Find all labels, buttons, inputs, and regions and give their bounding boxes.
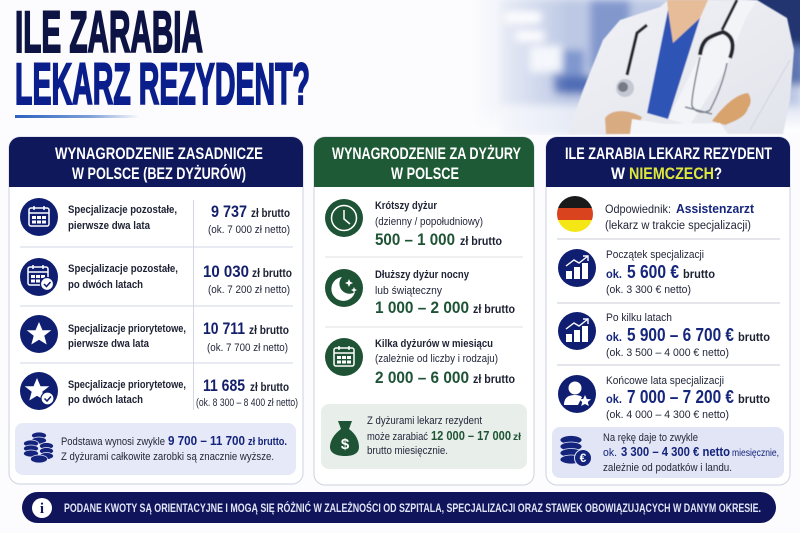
row: start of specialisation — [606, 249, 715, 296]
row: final years: brutto — [738, 394, 770, 406]
callout text: Z dyżurami całkowite zarobki są znacznie wyższe. — [61, 451, 274, 463]
panel header — [314, 137, 534, 187]
callout text: brutto miesięcznie. — [367, 445, 448, 457]
row 2 label — [68, 263, 178, 291]
row 1 label: Specjalizacje pozostałe, — [68, 204, 177, 216]
row 2 text: lub świąteczny — [375, 285, 442, 297]
text: LEKARZ REZYDENT? — [15, 52, 310, 117]
row: final years — [606, 375, 770, 421]
row 1 amount: zł brutto — [251, 208, 290, 220]
callout text — [61, 433, 287, 463]
icon: rising bars — [558, 249, 596, 287]
row 1 amount: (ok. 7 000 zł netto) — [208, 224, 290, 236]
heading: W POLSCE — [391, 164, 459, 183]
row: after a few years — [606, 312, 770, 359]
icon: coin stacks — [24, 432, 54, 463]
heading: W — [611, 164, 626, 183]
callout text: miesięcznie, — [732, 447, 779, 459]
row: after a few years: Po kilku latach — [606, 312, 672, 324]
row 3 label — [68, 323, 186, 350]
heading — [55, 144, 263, 183]
row: start of specialisation: brutto — [683, 269, 715, 281]
row 2 label: Specjalizacje pozostałe, — [68, 263, 178, 275]
row 3 text: (zależnie od liczby i rodzaju) — [375, 353, 498, 365]
callout: net pay — [552, 427, 784, 478]
row 4 label: po dwóch latach — [68, 394, 143, 406]
row 2 amount — [203, 262, 292, 296]
row 3 label: Specjalizacje priorytetowe, — [68, 323, 186, 335]
icon: person with star — [558, 375, 596, 413]
panel: resident pay in Germany — [546, 137, 790, 485]
heading: NIEMCZECH — [629, 164, 714, 183]
icon: coins with euro: € — [580, 451, 587, 465]
row 1 label: pierwsze dwa lata — [68, 220, 151, 232]
row 4 label: Specjalizacje priorytetowe, — [68, 379, 186, 391]
row 4 amount: 11 685 — [203, 376, 245, 395]
row 1 text: (dzienny / popołudniowy) — [375, 216, 483, 228]
icon: money bag: $ — [341, 436, 350, 453]
row: final years: Końcowe lata specjalizacji — [606, 375, 724, 387]
callout text: Na rękę daje to zwykle — [603, 432, 698, 444]
row 4 label — [68, 379, 186, 406]
row: start of specialisation: ok. — [606, 269, 622, 281]
row 3 text: 2 000 – 6 000 — [375, 368, 469, 387]
row: after a few years: (ok. 3 500 – 4 000 € netto) — [606, 347, 729, 359]
row: start of specialisation: Początek specjalizacji — [606, 249, 704, 261]
row 2 amount: (ok. 7 200 zł netto) — [208, 284, 290, 296]
row: after a few years: ok. — [606, 332, 622, 344]
row 1 amount — [208, 202, 290, 236]
callout text: 12 000 – 17 000 — [431, 428, 511, 443]
row: final years: ok. — [606, 394, 622, 406]
row: start of specialisation: 5 600 € — [627, 262, 679, 282]
row 2 text: 1 000 – 2 000 — [375, 298, 469, 317]
callout text: zł — [513, 432, 521, 443]
row 1 label — [68, 204, 177, 232]
heading: WYNAGRODZENIE ZASADNICZE — [55, 144, 263, 163]
row 2 text — [375, 269, 515, 317]
heading: ? — [714, 164, 722, 183]
callout: base pay summary — [15, 423, 296, 475]
row 2 text: Dłuższy dyżur nocny — [375, 269, 470, 281]
row 4 amount: (ok. 8 300 – 8 400 zł netto) — [196, 397, 298, 409]
icon: info — [32, 498, 52, 518]
icon: rising bars — [558, 312, 596, 350]
row 3 amount: 10 711 — [203, 319, 245, 338]
row 1 amount: 9 737 — [211, 202, 247, 221]
panel header — [546, 137, 790, 187]
row 3 amount: (ok. 7 700 zł netto) — [207, 342, 288, 354]
row 2 text: zł brutto — [473, 304, 515, 316]
icon: moon and stars — [325, 269, 363, 307]
title — [15, 0, 310, 117]
row: start of specialisation: (ok. 3 300 € netto) — [606, 284, 691, 296]
row 3 text: Kilka dyżurów w miesiącu — [375, 338, 493, 350]
icon: German flag — [557, 196, 593, 232]
icon: info: i — [40, 501, 44, 517]
icon: calendar — [325, 338, 363, 376]
icon: coins with euro — [560, 436, 592, 466]
heading: W POLSCE (BEZ DYŻURÓW) — [72, 164, 246, 183]
callout text: ok. — [603, 447, 617, 459]
row 3 text — [375, 338, 515, 387]
icon: star — [20, 315, 58, 353]
callout: total with on-call — [321, 404, 527, 469]
callout text — [603, 432, 779, 474]
icon: star with check — [20, 372, 58, 410]
equivalent role text: (lekarz w trakcie specjalizacji) — [605, 220, 751, 232]
row 1 text: 500 – 1 000 — [375, 230, 455, 249]
row 3 label: pierwsze dwa lata — [68, 338, 150, 350]
panel header — [9, 137, 303, 187]
icon: money bag — [330, 421, 359, 456]
row 3 text: zł brutto — [473, 374, 515, 386]
heading — [332, 144, 521, 183]
row: final years: (ok. 4 000 – 4 300 € netto) — [606, 409, 729, 421]
panel: base salary in Poland — [9, 137, 303, 484]
equivalent role text — [605, 202, 755, 232]
callout text — [367, 415, 521, 457]
callout text: zł brutto. — [248, 436, 287, 448]
row 3 amount — [203, 319, 289, 354]
callout text: Z dyżurami lekarz rezydent — [367, 415, 482, 427]
photo: doctor in hospital corridor — [470, 0, 800, 135]
icon: calendar with check — [20, 258, 58, 296]
row: after a few years: brutto — [738, 332, 770, 344]
callout text: 3 300 – 4 300 € netto — [621, 444, 730, 459]
equivalent role text: Odpowiednik: — [605, 202, 671, 216]
equivalent role text: Assistenzarzt — [676, 202, 755, 216]
row 1 text — [375, 200, 502, 249]
callout text: zależnie od podatków i landu. — [603, 462, 732, 474]
heading: WYNAGRODZENIE ZA DYŻURY — [332, 144, 521, 163]
footer note bar — [22, 492, 776, 523]
panel: on-call pay in Poland — [314, 137, 534, 485]
heading — [565, 144, 772, 183]
callout text: 9 700 – 11 700 — [168, 433, 245, 448]
row: final years: 7 000 – 7 200 € — [627, 387, 734, 407]
row 2 amount: zł brutto — [252, 268, 292, 280]
row 3 amount: zł brutto — [249, 325, 289, 337]
row 1 text: Krótszy dyżur — [375, 200, 438, 212]
row: after a few years: 5 900 – 6 700 € — [627, 325, 734, 345]
row 4 amount: zł brutto — [250, 382, 289, 394]
row 2 label: po dwóch latach — [68, 279, 143, 291]
title underline — [15, 115, 140, 118]
icon: clock — [325, 199, 363, 237]
row 4 amount — [196, 376, 298, 409]
callout text: Podstawa wynosi zwykle — [61, 436, 165, 448]
icon: calendar — [20, 198, 58, 236]
row 2 amount: 10 030 — [203, 262, 249, 281]
title: ILE ZARABIA — [15, 0, 203, 65]
callout text: może zarabiać — [367, 431, 428, 443]
row 1 text: zł brutto — [460, 236, 502, 248]
